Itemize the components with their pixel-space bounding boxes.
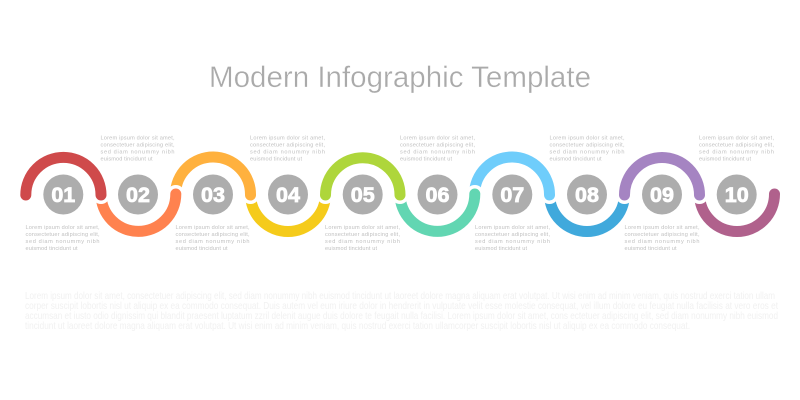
text block: step 02: consectetuer adipiscing elit, bbox=[100, 142, 175, 148]
text block: step 04: consectetuer adipiscing elit, bbox=[250, 142, 325, 148]
step badge 05: 05 bbox=[351, 183, 375, 207]
text block: step 03 bbox=[176, 225, 250, 252]
text block: step 05: consectetuer adipiscing elit, bbox=[325, 232, 400, 238]
text block: step 07 bbox=[475, 225, 550, 252]
text block: step 06: Lorem ipsum dolor sit amet, bbox=[400, 136, 475, 142]
arc 05 bbox=[316, 158, 409, 204]
text block: step 05 bbox=[325, 225, 400, 252]
text block: step 10 bbox=[699, 136, 774, 162]
step badge 08: 08 bbox=[575, 183, 599, 207]
text block: step 07: euismod tincidunt ut bbox=[475, 246, 527, 252]
step badge 02 bbox=[118, 174, 158, 214]
text block: step 07: sed diam nonummy nibh bbox=[475, 239, 550, 245]
text block: step 06 bbox=[400, 136, 475, 162]
step badge 01 bbox=[43, 174, 83, 214]
step badge 09 bbox=[642, 174, 682, 214]
text block: step 06: euismod tincidunt ut bbox=[400, 156, 452, 162]
step badge 08 bbox=[567, 174, 607, 214]
text block: step 08: sed diam nonummy nibh bbox=[550, 150, 624, 156]
text block: step 08: euismod tincidunt ut bbox=[550, 156, 602, 162]
text block: step 01: sed diam nonummy nibh bbox=[26, 239, 100, 245]
step badge 04: 04 bbox=[276, 183, 300, 207]
step badge 10 bbox=[717, 174, 757, 214]
text block: step 03: consectetuer adipiscing elit, bbox=[176, 232, 250, 238]
arc 09 bbox=[616, 158, 708, 204]
arc 01 bbox=[26, 157, 110, 204]
faint paragraph bbox=[25, 291, 778, 332]
text block: step 02: Lorem ipsum dolor sit amet, bbox=[100, 136, 175, 142]
text block: step 10: consectetuer adipiscing elit, bbox=[699, 142, 774, 148]
arc 02 bbox=[101, 185, 185, 231]
text block: step 09: consectetuer adipiscing elit, bbox=[624, 232, 700, 238]
step badge 09: 09 bbox=[650, 183, 674, 207]
step badge 01: 01 bbox=[51, 183, 75, 207]
text block: step 05: Lorem ipsum dolor sit amet, bbox=[325, 225, 400, 231]
text block: step 04: sed diam nonummy nibh bbox=[250, 150, 325, 156]
text block: step 08: consectetuer adipiscing elit, bbox=[550, 142, 625, 148]
arc 08 bbox=[550, 194, 624, 232]
arc 04 bbox=[250, 194, 326, 232]
wavy timeline bbox=[26, 157, 775, 232]
step badge 05 bbox=[343, 174, 383, 214]
text block: step 05: sed diam nonummy nibh bbox=[325, 239, 400, 245]
text block: step 01: consectetuer adipiscing elit, bbox=[26, 232, 100, 238]
text block: step 04: Lorem ipsum dolor sit amet, bbox=[250, 136, 325, 142]
text block: step 04: euismod tincidunt ut bbox=[250, 156, 302, 162]
step badge 03 bbox=[193, 174, 233, 214]
step badge 06: 06 bbox=[426, 183, 449, 207]
text block: step 08 bbox=[550, 136, 625, 162]
step badge 03: 03 bbox=[201, 183, 225, 207]
text block: step 09: euismod tincidunt ut bbox=[624, 246, 677, 252]
arc 10 bbox=[700, 194, 774, 232]
text block: step 06: sed diam nonummy nibh bbox=[400, 150, 475, 156]
step badge 07: 07 bbox=[500, 183, 524, 207]
text block: step 02: sed diam nonummy nibh bbox=[100, 150, 174, 156]
text block: step 09: Lorem ipsum dolor sit amet, bbox=[624, 225, 700, 231]
text block: step 10: Lorem ipsum dolor sit amet, bbox=[699, 136, 774, 142]
step badge 06 bbox=[418, 174, 458, 214]
text block: step 04 bbox=[250, 136, 325, 162]
text block: step 03: Lorem ipsum dolor sit amet, bbox=[176, 225, 250, 231]
arc 03 bbox=[176, 157, 260, 204]
text block: step 08: Lorem ipsum dolor sit amet, bbox=[550, 136, 625, 142]
text block: step 01: Lorem ipsum dolor sit amet, bbox=[26, 225, 100, 231]
arc 06 bbox=[400, 185, 484, 231]
text block: step 02: euismod tincidunt ut bbox=[100, 156, 153, 162]
text block: step 01 bbox=[26, 225, 100, 252]
text block: step 01: euismod tincidunt ut bbox=[26, 246, 78, 252]
step badge 04 bbox=[268, 174, 308, 214]
text block: step 05: euismod tincidunt ut bbox=[325, 246, 377, 252]
text block: step 07: Lorem ipsum dolor sit amet, bbox=[475, 225, 550, 231]
text block: step 06: consectetuer adipiscing elit, bbox=[400, 142, 475, 148]
text block: step 10: sed diam nonummy nibh bbox=[699, 150, 774, 156]
step badge 02: 02 bbox=[126, 183, 150, 207]
title: Modern Infographic Template bbox=[209, 61, 591, 94]
step badge 10: 10 bbox=[725, 183, 749, 207]
text block: step 07: consectetuer adipiscing elit, bbox=[475, 232, 550, 238]
text block: step 03: euismod tincidunt ut bbox=[176, 246, 228, 252]
text block: step 02 bbox=[100, 136, 175, 162]
text block: step 09: sed diam nonummy nibh bbox=[624, 239, 700, 245]
text block: step 03: sed diam nonummy nibh bbox=[176, 239, 250, 245]
text block: step 09 bbox=[624, 225, 700, 252]
arc 07 bbox=[474, 157, 558, 204]
step badge 07 bbox=[492, 174, 532, 214]
text block: step 10: euismod tincidunt ut bbox=[699, 156, 751, 162]
